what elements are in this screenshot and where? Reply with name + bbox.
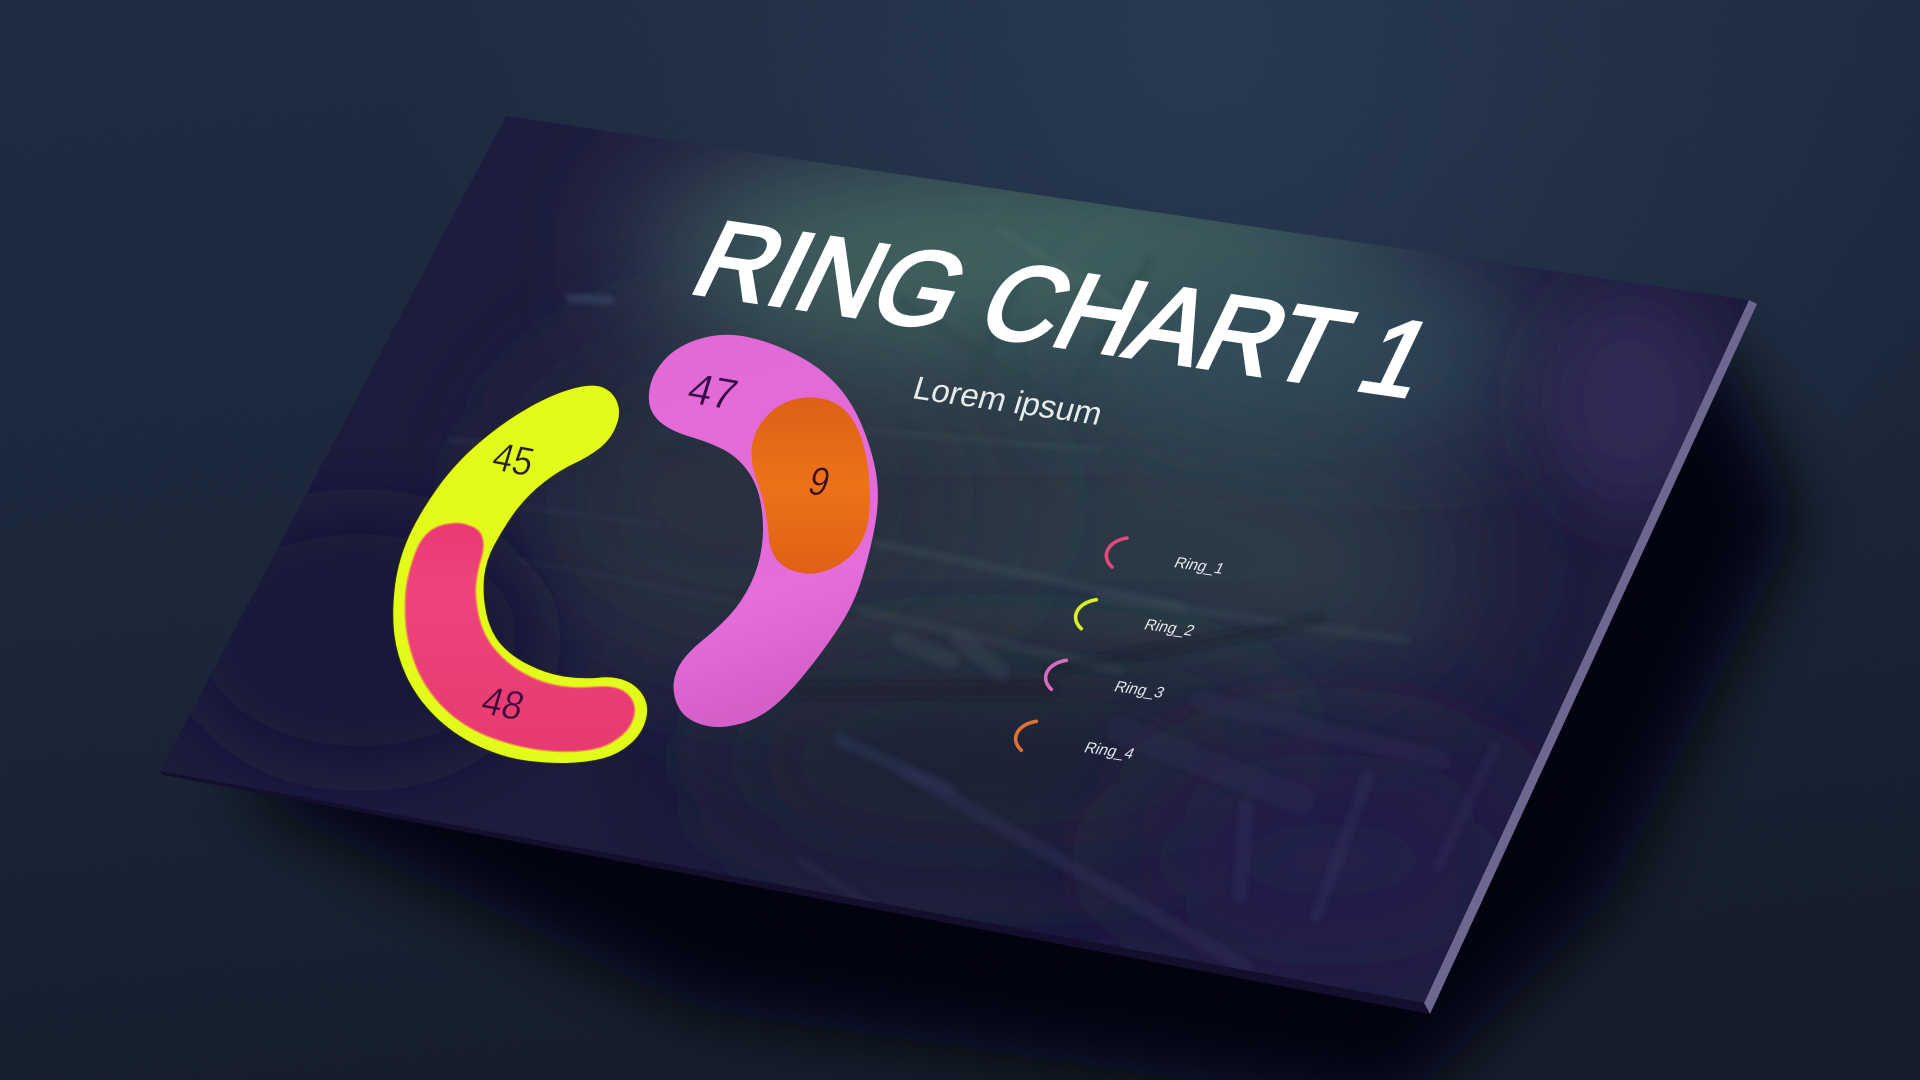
legend item: Ring_3	[1046, 660, 1167, 702]
ring 4 segment: orange	[751, 397, 870, 574]
photo streaks	[452, 292, 1496, 970]
value 45: 45	[487, 434, 539, 485]
legend item: Ring_4	[1016, 721, 1137, 763]
slide bottom edge	[160, 771, 1430, 1014]
legend item: Ring_2	[1076, 600, 1197, 640]
ring chart	[393, 335, 878, 763]
ring 2 segment: yellow	[393, 385, 648, 763]
title: RING CHART 1	[675, 200, 1453, 420]
subtitle: Lorem ipsum	[909, 369, 1107, 432]
legend item: Ring_1: Ring_1	[1171, 555, 1227, 578]
slab drop shadow	[230, 340, 1800, 1080]
legend item: Ring_4: Ring_4	[1081, 740, 1137, 763]
value 9: 9	[804, 458, 835, 505]
legend item: Ring_3: Ring_3	[1111, 679, 1167, 702]
value 47: 47	[682, 365, 743, 420]
legend	[1016, 538, 1227, 763]
legend item: Ring_2: Ring_2	[1141, 617, 1197, 640]
slide side edge	[1424, 300, 1757, 1014]
value 48: 48	[476, 679, 529, 729]
slide face with photo backdrop	[161, 116, 1749, 1003]
legend item: Ring_1	[1106, 538, 1227, 578]
ring 1 segment: pink	[405, 523, 635, 752]
ring 3 segment: magenta	[649, 335, 878, 727]
panel: tilted slide	[160, 116, 1757, 1014]
